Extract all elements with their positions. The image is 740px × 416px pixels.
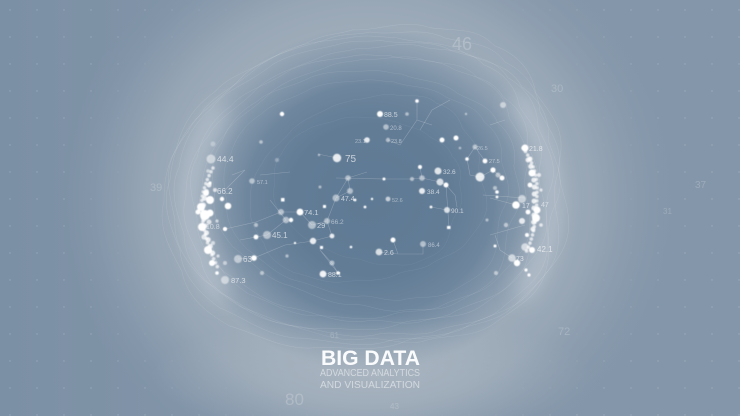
node value labels: 75 xyxy=(345,154,357,165)
faint background numbers: 43 xyxy=(390,402,399,411)
subtitle line one: ADVANCED ANALYTICS xyxy=(320,368,420,379)
left data cluster xyxy=(196,168,231,275)
node value labels: 20.8 xyxy=(390,126,402,132)
faint background numbers: 61 xyxy=(330,331,339,340)
node value labels: 44.4 xyxy=(217,154,234,164)
node value labels: 87.3 xyxy=(231,276,246,285)
node value labels: 57.1 xyxy=(257,180,268,186)
node value labels: 47 xyxy=(541,202,549,209)
heading: big data: BIG DATA xyxy=(321,347,420,370)
node value labels: 23.8 xyxy=(391,139,402,145)
node value labels: 86.4 xyxy=(428,243,440,249)
node value labels: 21.8 xyxy=(529,146,543,153)
faint background numbers: 31 xyxy=(663,207,672,216)
node value labels: 17 xyxy=(522,203,530,210)
node value labels: 38.4 xyxy=(427,189,440,196)
network links xyxy=(225,100,525,274)
node value labels: 27.5 xyxy=(489,159,500,165)
node value labels: 29 xyxy=(317,221,325,230)
contour lines xyxy=(144,6,581,369)
faint background numbers: 72 xyxy=(558,326,570,338)
title block xyxy=(320,347,420,391)
faint background numbers: 37 xyxy=(695,180,707,191)
node value labels: 66.2 xyxy=(217,187,233,196)
right data cluster xyxy=(508,144,543,277)
faint background numbers: 30 xyxy=(551,83,563,95)
faint background numbers: 80 xyxy=(285,390,304,409)
node value labels: 45.1 xyxy=(272,231,288,240)
node value labels: 88.5 xyxy=(384,112,398,119)
node value labels: 10.8 xyxy=(206,224,220,231)
node value labels xyxy=(206,112,553,285)
node value labels: 26.5 xyxy=(477,146,488,152)
node value labels: 74.1 xyxy=(304,208,319,217)
translucent nodes xyxy=(206,102,508,284)
faint background numbers xyxy=(150,34,707,411)
node value labels: 42.1 xyxy=(537,245,553,254)
node value labels: 52.6 xyxy=(392,198,403,204)
node value labels: 66.2 xyxy=(331,219,344,226)
side glows xyxy=(193,100,549,295)
bright nodes xyxy=(223,99,504,277)
subtitle line two: AND VISUALIZATION xyxy=(320,380,420,391)
node value labels: 63 xyxy=(243,255,252,264)
faint background numbers: 39 xyxy=(150,182,162,194)
node value labels: 23.1 xyxy=(355,139,366,145)
node value labels: 90.1 xyxy=(451,208,464,215)
faint background numbers: 46 xyxy=(452,34,472,54)
node value labels: 2.6 xyxy=(384,250,394,257)
node value labels: 47.4 xyxy=(341,196,355,203)
node value labels: 73 xyxy=(516,256,524,263)
node value labels: 32.6 xyxy=(443,169,456,176)
bottom glow xyxy=(150,315,590,416)
node value labels: 88.1 xyxy=(328,272,342,279)
